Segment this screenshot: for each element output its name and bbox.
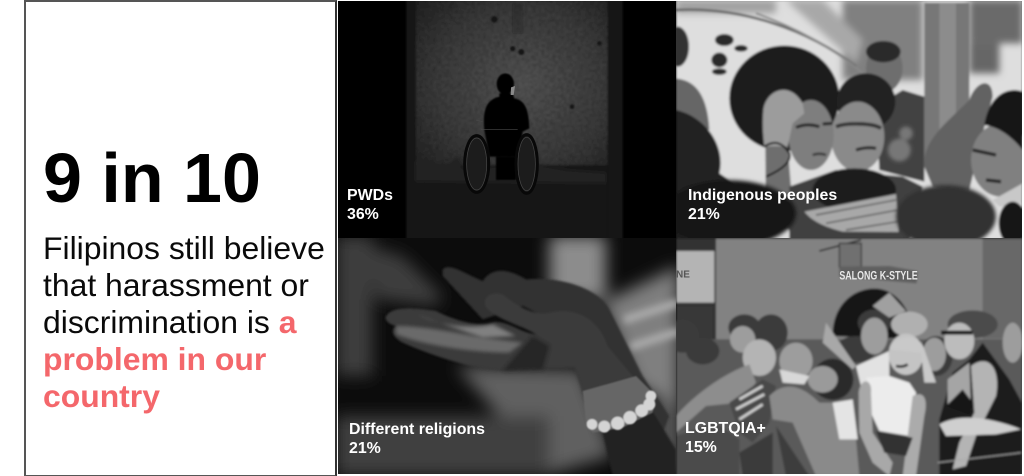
panel: Different religions photo	[338, 238, 676, 474]
right person	[924, 83, 993, 190]
text block: statement: that harassment or	[43, 267, 309, 303]
people at left	[666, 27, 689, 67]
right woman	[948, 310, 998, 338]
panel: PWDs photo	[338, 1, 676, 238]
foreground hair and clothes	[789, 170, 923, 240]
label: Indigenous peoples 21%: Indigenous peoples	[688, 187, 837, 204]
label: PWDs 36%	[347, 187, 393, 223]
label: Different religions 21%	[349, 421, 485, 457]
label: PWDs 36%: 36%	[347, 206, 379, 223]
panel: Indigenous peoples photo	[676, 1, 1022, 238]
forearm	[584, 393, 676, 476]
text block: statement: discrimination is a	[43, 304, 296, 340]
text block: statement: country	[43, 378, 160, 414]
bracelet	[583, 376, 656, 433]
text block: statement: Filipinos still believe	[43, 230, 325, 266]
label: LGBTQIA+ 15%	[685, 420, 766, 456]
heading: 9 in 10: 9 in 10	[43, 139, 261, 217]
crowd	[676, 339, 1023, 476]
text block: statement	[43, 230, 325, 414]
label: Indigenous peoples 21%	[688, 187, 837, 223]
hand and arm	[763, 90, 804, 147]
central woman	[889, 334, 923, 375]
first woman face	[788, 100, 834, 170]
label: LGBTQIA+ 15%: 15%	[685, 439, 717, 456]
panel: LGBTQIA+ photo	[676, 238, 1022, 474]
label: Different religions 21%: 21%	[349, 440, 381, 457]
arms and shirts	[676, 364, 756, 433]
pillar	[924, 3, 969, 159]
photo: person in wheelchair facing wall	[406, 1, 624, 238]
text block: statement: problem in our	[43, 341, 266, 377]
lower left	[676, 423, 739, 476]
doorway	[833, 289, 914, 339]
partial storefront text: NE	[676, 270, 690, 281]
background person	[866, 44, 903, 92]
rear hand	[443, 267, 669, 433]
embracing man	[812, 359, 853, 400]
second woman hair and face	[837, 73, 895, 130]
photo: open hands in prayer with pearl bracelet	[338, 238, 676, 474]
label: Indigenous peoples 21%: 21%	[688, 206, 720, 223]
photo: pride parade crowd	[676, 238, 1022, 474]
label: PWDs 36%: PWDs	[347, 187, 393, 204]
storefront sign	[819, 240, 861, 251]
label: Different religions 21%: Different religions	[349, 421, 485, 438]
front hand	[386, 293, 641, 401]
label: LGBTQIA+ 15%: LGBTQIA+	[685, 420, 766, 437]
big afro	[729, 46, 839, 151]
panel: statistic text	[24, 0, 337, 476]
sign text: SALONG K-STYLE	[839, 268, 918, 282]
photo: indigenous women in a crowd	[676, 1, 1022, 238]
